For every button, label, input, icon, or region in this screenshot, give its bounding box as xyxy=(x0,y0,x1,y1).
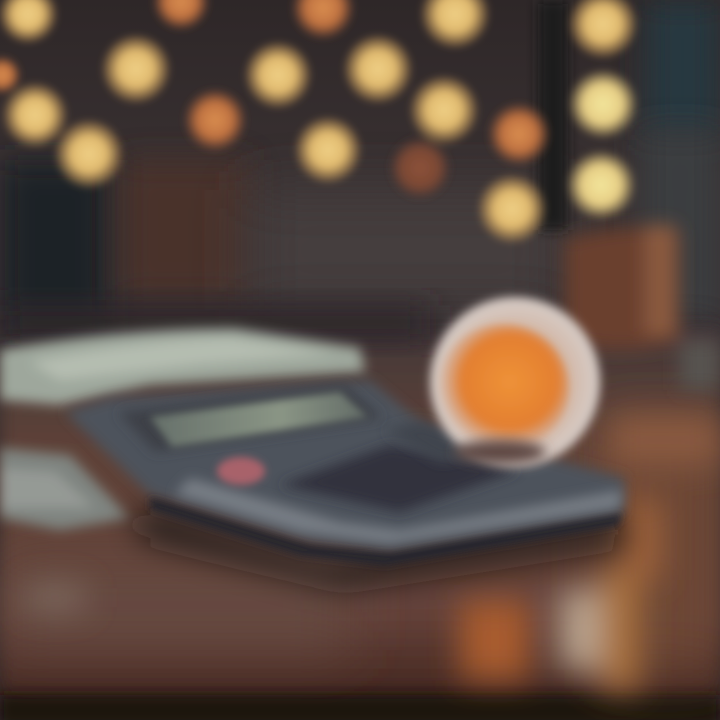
papers stack, left xyxy=(0,328,365,530)
bokeh lights xyxy=(0,0,636,242)
brown cup, right xyxy=(565,225,720,390)
orange sphere xyxy=(425,292,605,472)
red key xyxy=(217,457,265,485)
calculator keypad xyxy=(280,445,520,512)
calculator body xyxy=(65,380,625,552)
orange core xyxy=(437,324,569,452)
calculator screen xyxy=(118,385,382,452)
wooden table xyxy=(0,305,720,720)
sphere shell xyxy=(425,292,605,472)
calculator shadow xyxy=(140,510,625,585)
calculator xyxy=(65,380,625,585)
table reflections xyxy=(25,415,720,690)
